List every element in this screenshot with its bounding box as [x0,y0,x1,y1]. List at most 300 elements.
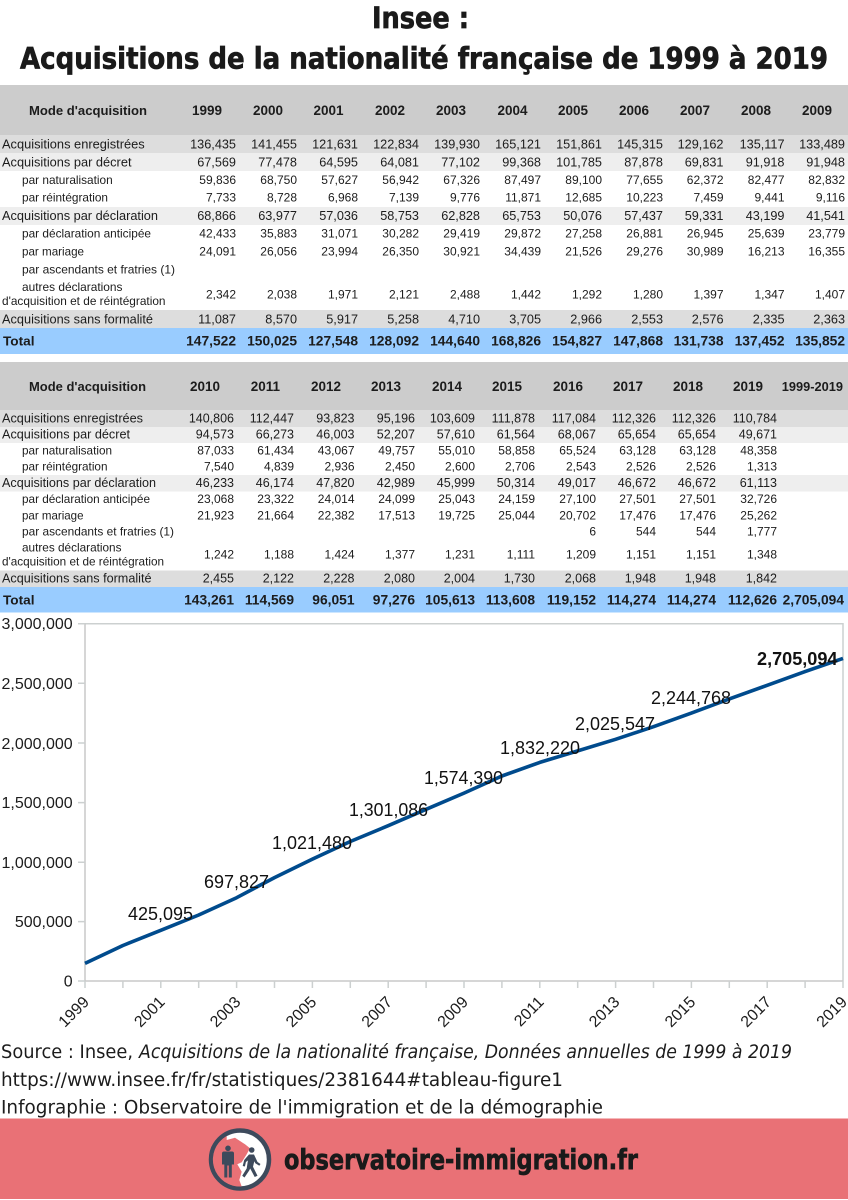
row: autres déclarations: 1,151 [686,547,716,561]
row: par déclaration anticipée: 23,068 [197,492,234,506]
row: acquisitions par déclaration: 46,672 [618,476,656,490]
row: par déclaration anticipée: par déclaration anticipée [22,228,151,241]
table header row 1999-2009: 2007 [680,103,710,118]
x axis labels [56,994,848,1031]
row: par mariage: 29,276 [626,245,663,259]
table header row 1999-2009: 1999 [192,103,222,118]
row: acquisitions sans formalité: 5,917 [326,312,358,326]
row: acquisitions enregistrées: 151,861 [556,137,602,151]
title: Insee : [372,1,469,35]
row: acquisitions sans formalité: Acquisitions sans formalité [2,570,152,585]
row: acquisitions sans formalité: 4,710 [448,312,480,326]
table header row 2010-2019 [0,362,848,410]
row: par ascendants et fratries: par ascendants et fratries (1) [22,263,175,276]
row: acquisitions par décret: 46,003 [316,428,355,442]
row: par réintégration: 9,441 [754,191,785,205]
row: total 1999-2009: 144,640 [430,334,480,349]
row: autres déclarations: 1,397 [693,287,724,301]
table header row 1999-2009: 2004 [497,103,528,118]
row: acquisitions enregistrées: 133,489 [799,137,845,151]
row: total 1999-2009: 128,092 [369,334,419,349]
row: par déclaration anticipée: 27,100 [559,492,596,506]
row: total 2010-2019: 2,705,094 [783,592,844,607]
row: autres déclarations: 1,151 [626,547,656,561]
row: acquisitions par déclaration: 50,314 [497,476,535,490]
row: autres déclarations: 2,121 [389,287,419,301]
row: par naturalisation: 87,497 [504,173,541,187]
row: par naturalisation: 65,524 [559,444,596,458]
row: par mariage: 21,923 [197,508,234,522]
row: acquisitions par déclaration [0,475,848,492]
row: par mariage: 19,725 [438,508,475,522]
row: acquisitions enregistrées: 129,162 [678,137,724,151]
row: par réintégration: 6,968 [328,191,358,205]
row: par déclaration anticipée: 27,258 [565,227,602,241]
row: total 2010-2019: 119,152 [547,592,596,607]
table header row 2010-2019: 2016 [553,379,583,394]
row: par déclaration anticipée: 26,881 [626,227,663,241]
row: par mariage [22,245,845,259]
row: par naturalisation: 56,942 [382,173,419,187]
row: autres déclarations: 1,347 [754,287,785,301]
row: par ascendants et fratries: 544 [636,525,656,539]
table header row 2010-2019: 2017 [613,379,643,394]
x axis labels: 2001 [131,994,169,1031]
x axis labels: 1999 [56,994,93,1031]
row: autres déclarations: 1,377 [385,547,415,561]
y axis labels [2,616,73,990]
row: par naturalisation [22,444,777,458]
row: par naturalisation: 82,832 [808,173,845,187]
row: par déclaration anticipée: 29,872 [504,227,541,241]
row: par réintégration: 11,871 [505,191,541,205]
row: par réintégration [22,460,777,474]
row: par déclaration anticipée: 26,945 [687,227,724,241]
row: acquisitions par déclaration: 68,866 [197,209,236,223]
row: par déclaration anticipée [22,492,777,506]
row: acquisitions enregistrées: 112,326 [672,412,716,426]
row: acquisitions enregistrées: 95,196 [377,412,415,426]
data labels: 697,827 [204,872,269,892]
row: autres déclarations: 1,348 [747,547,777,561]
row: par déclaration anticipée: 23,779 [808,227,845,241]
row: par réintégration: 7,733 [206,191,236,205]
row: par réintégration: 7,459 [693,191,724,205]
row: total 1999-2009 [0,328,848,354]
row: acquisitions par déclaration: 42,989 [377,476,415,490]
row: acquisitions par décret: 87,878 [624,156,663,170]
row: total 1999-2009: 150,025 [247,334,297,349]
row: par réintégration: par réintégration [22,461,108,474]
row: par mariage: 25,262 [740,508,777,522]
row: par mariage: 26,056 [260,245,297,259]
x axis labels: 2013 [586,994,624,1031]
row: acquisitions par décret: 66,273 [256,428,294,442]
row: acquisitions par décret: 65,654 [678,428,716,442]
source text block: Source : Insee, [1,1042,133,1063]
row: par déclaration anticipée: 25,043 [438,492,475,506]
row: acquisitions par déclaration: 45,999 [437,476,475,490]
row: autres déclarations: 1,242 [204,547,234,561]
row: acquisitions enregistrées [0,135,848,153]
row: par naturalisation [22,173,845,187]
row: total 1999-2009: 147,868 [613,334,663,349]
x axis labels: 2007 [359,994,396,1031]
row: par déclaration anticipée: 42,433 [199,227,236,241]
row: acquisitions sans formalité: 11,087 [198,312,236,326]
row: par déclaration anticipée: 23,322 [257,492,294,506]
row: acquisitions par déclaration: 58,753 [380,209,419,223]
row: par déclaration anticipée: 25,639 [748,227,785,241]
row: autres déclarations: 1,111 [507,547,535,561]
row: par naturalisation: 48,358 [740,444,777,458]
row: par mariage: 20,702 [559,508,596,522]
row: acquisitions par décret: Acquisitions par décret [2,154,132,170]
row: acquisitions par décret: Acquisitions par décret [2,427,130,442]
row: autres déclarations: 1,292 [572,287,602,301]
row: total 2010-2019: 143,261 [184,592,234,607]
row: par déclaration anticipée: 24,099 [378,492,415,506]
row: total 1999-2009: Total [3,334,34,349]
row: par réintégration: 4,839 [264,460,294,474]
row: par déclaration anticipée: par déclaration anticipée [22,493,150,506]
table header row 2010-2019: 1999-2019 [782,379,843,394]
row: total 2010-2019: 113,608 [486,592,535,607]
row: total 1999-2009: 135,852 [795,334,845,349]
table header row 2010-2019: 2010 [190,379,220,394]
row: acquisitions enregistrées: 111,878 [492,412,535,426]
row: acquisitions par déclaration: 63,977 [258,209,297,223]
row: par réintégration: 2,450 [385,460,415,474]
row: total 1999-2009: 131,738 [674,334,724,349]
row: total 2010-2019: Total [3,592,34,607]
row: par mariage: 24,091 [199,245,236,259]
row: acquisitions par décret: 61,564 [497,428,535,442]
row: autres déclarations: 1,231 [445,547,475,561]
row: acquisitions par déclaration: Acquisitions par déclaration [2,208,158,223]
data labels: 1,301,086 [349,800,428,820]
data labels: 1,021,480 [272,833,352,853]
row: acquisitions enregistrées: 112,447 [250,412,294,426]
row: par réintégration: 2,526 [626,460,656,474]
row: autres déclarations: 1,971 [328,287,358,301]
row: par déclaration anticipée: 35,883 [260,227,297,241]
row: par réintégration: 2,526 [686,460,716,474]
row: total 1999-2009: 137,452 [735,334,785,349]
row: par mariage: 26,350 [382,245,419,259]
x axis labels: 2005 [283,994,320,1031]
row: acquisitions sans formalité: 8,570 [265,312,297,326]
row: par mariage: 16,355 [808,245,845,259]
title [20,1,828,76]
y axis labels: 500,000 [15,914,73,931]
x axis labels: 2009 [435,994,472,1031]
row: par déclaration anticipée: 27,501 [619,492,656,506]
row: par réintégration: 2,936 [324,460,355,474]
row: total 2010-2019: 112,626 [728,592,777,607]
data labels [128,649,838,924]
row: par déclaration anticipée: 31,071 [321,227,358,241]
row: acquisitions sans formalité: 2,228 [323,571,355,585]
line chart: cumulative acquisitions [2,616,848,1031]
row: par naturalisation: 59,836 [199,173,236,187]
x axis labels: 2017 [738,994,775,1031]
row: acquisitions enregistrées: 117,084 [552,412,596,426]
table header row 1999-2009: Mode d'acquisition [29,103,147,118]
row: par mariage: 17,476 [619,508,656,522]
panel: table 1999-2009 [0,85,848,354]
row: par naturalisation: 82,477 [748,173,785,187]
row: autres déclarations: 1,188 [264,547,294,561]
row: par mariage: 21,526 [565,245,602,259]
row: par naturalisation: 58,858 [498,444,535,458]
table header row 2010-2019: 2019 [733,379,763,394]
source text block: https://www.insee.fr/fr/statistiques/2381644#tableau-figure1 [1,1070,563,1091]
row: autres déclarations: autres déclarations [22,281,123,294]
row: acquisitions par déclaration: 49,017 [558,476,596,490]
row: acquisitions sans formalité: 1,948 [685,571,716,585]
table header row 2010-2019: 2018 [673,379,703,394]
row: acquisitions par déclaration: 65,753 [502,209,541,223]
row: acquisitions enregistrées: 165,121 [495,137,541,151]
row: acquisitions par déclaration: 61,113 [740,476,777,490]
row: acquisitions par décret: 91,918 [746,156,784,170]
row: autres déclarations: 2,038 [267,287,297,301]
row: par mariage: 16,213 [748,245,785,259]
row: par ascendants et fratries: 6 [589,525,596,539]
row: acquisitions par déclaration: 50,076 [563,209,602,223]
row: par naturalisation: 89,100 [565,173,602,187]
table header row 2010-2019: 2012 [311,379,341,394]
table header row 2010-2019: 2013 [371,379,401,394]
row: acquisitions enregistrées: 140,806 [189,412,234,426]
row: acquisitions par déclaration: 43,199 [746,209,784,223]
row: par mariage: 21,664 [257,508,294,522]
row: par ascendants et fratries: 544 [696,525,716,539]
row: acquisitions sans formalité: 2,455 [203,571,234,585]
row: par réintégration: 2,706 [505,460,535,474]
row: autres déclarations: d'acquisition et de réintégration [2,555,164,568]
row: acquisitions enregistrées: 145,315 [617,137,663,151]
row: par réintégration: 2,543 [566,460,596,474]
row: total 1999-2009: 154,827 [552,334,602,349]
row: par déclaration anticipée: 24,159 [498,492,535,506]
row: acquisitions sans formalité: 2,553 [631,312,663,326]
row: total 2010-2019: 96,051 [312,592,355,607]
row: acquisitions par décret: 94,573 [196,428,234,442]
row: par naturalisation: 87,033 [197,444,234,458]
row: par mariage: 25,044 [498,508,535,522]
table header row 2010-2019: 2011 [251,379,280,394]
row: par naturalisation: par naturalisation [22,174,113,187]
table header row 1999-2009: 2003 [436,103,466,118]
data labels: 1,832,220 [500,738,580,758]
source text block [1,1042,792,1118]
table header row 2010-2019: 2014 [432,379,462,394]
table header row 1999-2009: 2000 [253,103,283,118]
source text block: Infographie : Observatoire de l'immigration et de la démographie [1,1098,603,1118]
row: acquisitions enregistrées: 121,631 [312,137,358,151]
row: acquisitions par décret: 52,207 [377,428,415,442]
x axis labels: 2015 [662,994,699,1031]
row: acquisitions par déclaration: 59,331 [685,209,724,223]
row: acquisitions par décret: 77,102 [441,156,480,170]
row: par mariage: 17,513 [378,508,415,522]
panel: table 2010-2019 [0,362,848,612]
row: acquisitions enregistrées: Acquisitions enregistrées [2,136,145,151]
row: autres déclarations [2,281,845,308]
row: par naturalisation: 55,010 [438,444,475,458]
row: acquisitions enregistrées: 135,117 [740,137,784,151]
row: acquisitions sans formalité: 2,122 [263,571,294,585]
row: acquisitions par déclaration [0,207,848,225]
row: autres déclarations: 2,342 [206,287,236,301]
row: acquisitions enregistrées: 136,435 [190,137,236,151]
row: total 2010-2019: 114,274 [667,592,716,607]
row: par déclaration anticipée: 29,419 [443,227,480,241]
row: acquisitions par décret: 77,478 [258,156,297,170]
row: acquisitions par déclaration: 62,828 [441,209,480,223]
row: acquisitions par décret: 69,831 [685,156,724,170]
y axis labels: 2,000,000 [2,736,73,753]
row: acquisitions enregistrées: 110,784 [733,412,777,426]
row: acquisitions sans formalité: 1,948 [625,571,656,585]
row: par réintégration: 12,685 [565,191,602,205]
row: par déclaration anticipée [22,227,845,241]
row: autres déclarations: autres déclarations [22,542,122,555]
row: par naturalisation: 61,434 [257,444,294,458]
row: par naturalisation: 63,128 [679,444,716,458]
table header row 1999-2009: 2008 [741,103,771,118]
row: acquisitions sans formalité: 1,842 [746,571,777,585]
row: total 2010-2019: 97,276 [373,592,415,607]
table header row 2010-2019: 2015 [492,379,522,394]
row: acquisitions enregistrées: 103,609 [430,412,475,426]
row: acquisitions sans formalité: Acquisitions sans formalité [2,311,153,326]
row: autres déclarations: 1,209 [566,547,596,561]
data labels: 2,705,094 [757,649,838,669]
y axis labels: 1,500,000 [2,795,73,812]
row: par réintégration [22,191,845,205]
row: par ascendants et fratries: par ascendants et fratries (1) [22,526,174,539]
row: autres déclarations: 1,407 [815,287,845,301]
row: acquisitions sans formalité: 2,363 [813,312,845,326]
row: acquisitions par déclaration: 46,174 [256,476,294,490]
row: par mariage: par mariage [22,509,84,522]
row: acquisitions par décret: 65,654 [618,428,656,442]
row: par mariage: 23,994 [321,245,358,259]
row: acquisitions enregistrées: 122,834 [373,137,419,151]
row: par mariage: 30,921 [443,245,480,259]
row: acquisitions par décret: 101,785 [556,156,602,170]
website name: observatoire-immigration.fr [284,1143,638,1176]
data labels: 425,095 [128,904,193,924]
row: par réintégration: 2,600 [445,460,475,474]
row: par mariage: 22,382 [318,508,355,522]
data labels: 1,574,390 [424,768,503,788]
table header row 2010-2019: Mode d'acquisition [29,379,146,394]
row: par naturalisation: 67,326 [443,173,480,187]
row: acquisitions par déclaration: 57,437 [624,209,663,223]
x axis labels: 2011 [511,994,548,1030]
table header row 1999-2009: 2006 [619,103,649,118]
row: acquisitions sans formalité: 2,004 [444,571,475,585]
y axis labels: 1,000,000 [2,855,73,872]
row: acquisitions par décret: 99,368 [502,156,541,170]
row: autres déclarations [2,542,777,568]
data line [85,658,843,963]
row: autres déclarations: 1,424 [324,547,355,561]
row: par naturalisation: 43,067 [318,444,355,458]
row: par mariage: 30,989 [687,245,724,259]
y axis labels: 3,000,000 [2,616,73,633]
row: par naturalisation: 62,372 [687,173,724,187]
row: acquisitions sans formalité: 5,258 [387,312,419,326]
row: par naturalisation: 63,128 [619,444,656,458]
row: autres déclarations: 1,280 [633,287,663,301]
row: acquisitions sans formalité [0,570,848,587]
row: acquisitions par décret: 64,595 [319,156,358,170]
row: par déclaration anticipée: 32,726 [740,492,777,506]
icon: observatoire logo [211,1130,269,1188]
row: acquisitions sans formalité: 2,080 [384,571,415,585]
table header row 1999-2009: 2001 [313,103,344,118]
row: par déclaration anticipée: 24,014 [318,492,355,506]
row: acquisitions par déclaration: 46,672 [678,476,716,490]
row: par déclaration anticipée: 30,282 [382,227,419,241]
row: acquisitions enregistrées: 112,326 [612,412,656,426]
data labels: 2,025,547 [575,714,655,734]
row: acquisitions sans formalité: 2,966 [570,312,602,326]
table header row 1999-2009: 2005 [558,103,588,118]
table header row 1999-2009 [0,85,848,135]
row: total 1999-2009: 147,522 [186,334,236,349]
row: total 1999-2009: 127,548 [308,334,358,349]
row: par réintégration: 8,728 [267,191,297,205]
table header row 1999-2009: 2009 [802,103,832,118]
row: acquisitions par déclaration: 41,541 [806,209,845,223]
row: acquisitions sans formalité: 3,705 [509,312,541,326]
row: autres déclarations: 1,442 [511,287,541,301]
row: par mariage [22,508,777,522]
row: total 2010-2019: 114,274 [607,592,656,607]
row: acquisitions par décret: 91,948 [806,156,845,170]
row: par mariage: 17,476 [679,508,716,522]
row: acquisitions par décret: 68,067 [558,428,596,442]
row: total 2010-2019 [0,587,848,612]
y axis labels: 2,500,000 [2,676,73,693]
row: par naturalisation: 68,750 [260,173,297,187]
row: total 2010-2019: 114,569 [245,592,294,607]
row: autres déclarations: d'acquisition et de réintégration [2,295,166,308]
row: par naturalisation: 57,627 [321,173,358,187]
row: acquisitions enregistrées: 93,823 [316,412,355,426]
data labels: 2,244,768 [651,688,731,708]
y axis labels: 0 [64,974,73,990]
row: acquisitions par décret [0,153,848,171]
row: acquisitions par déclaration: 47,820 [316,476,355,490]
row: acquisitions par déclaration: Acquisitions par déclaration [2,475,156,490]
row: acquisitions enregistrées: Acquisitions enregistrées [2,411,143,426]
row: acquisitions par déclaration: 57,036 [319,209,358,223]
row: par réintégration: 1,313 [747,460,777,474]
row: par déclaration anticipée: 27,501 [679,492,716,506]
row: autres déclarations: 2,488 [450,287,480,301]
row: acquisitions enregistrées [0,410,848,427]
row: par réintégration: 9,776 [450,191,480,205]
row: par naturalisation: 77,655 [626,173,663,187]
row: par mariage: 34,439 [504,245,541,259]
